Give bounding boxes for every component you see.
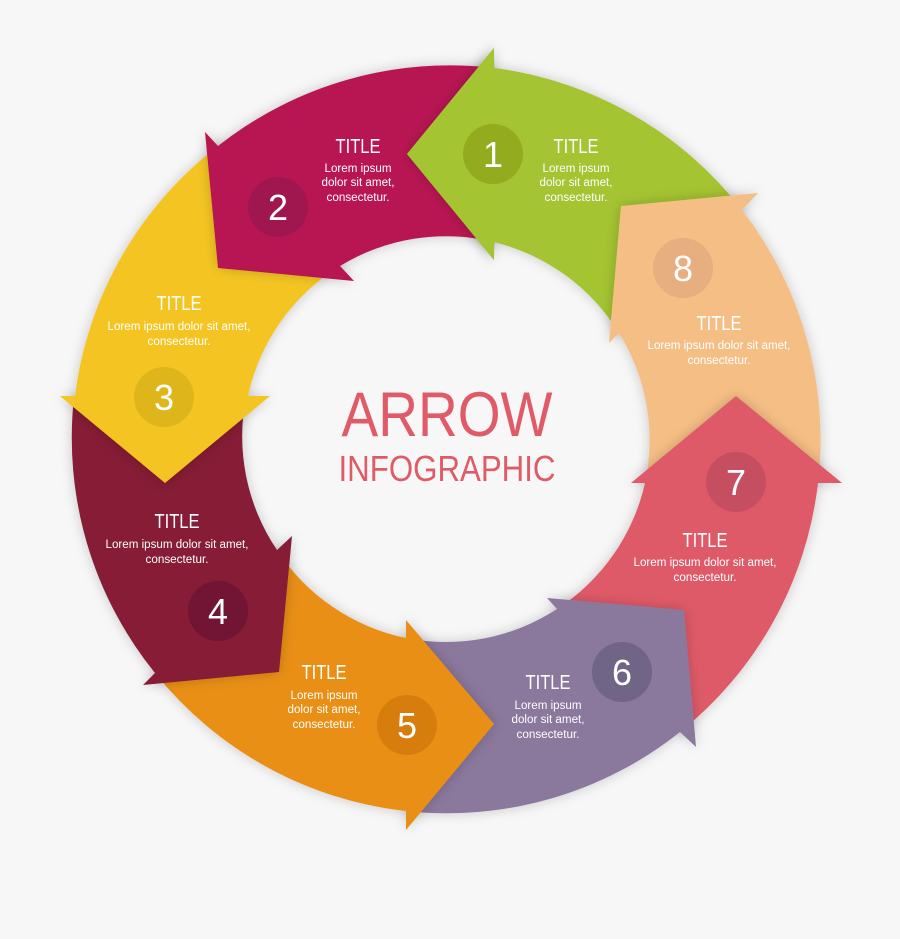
- arrow 4 shape: [72, 397, 292, 685]
- arrow 3: [60, 143, 340, 483]
- number badge 3: 3: [154, 377, 174, 418]
- text block 1: consectetur.: [544, 192, 608, 204]
- text block 6: TITLE: [526, 672, 570, 694]
- text block 4: Lorem ipsum dolor sit amet,: [106, 539, 249, 551]
- text block 7: Lorem ipsum dolor sit amet,: [634, 557, 776, 569]
- text block 5: TITLE: [302, 662, 346, 684]
- text block 6: dolor sit amet,: [512, 714, 584, 726]
- text block 7: consectetur.: [674, 572, 736, 584]
- text block 2: dolor sit amet,: [322, 177, 394, 189]
- text block 3: Lorem ipsum dolor sit amet,: [108, 321, 251, 333]
- text block 8: TITLE: [696, 313, 742, 335]
- number badge 4: 4: [208, 591, 228, 632]
- arrow 2 shape: [205, 65, 494, 281]
- arrow 1 head shape: [406, 48, 494, 260]
- text block 3: [108, 293, 251, 348]
- text block 6: consectetur.: [516, 729, 580, 741]
- text block 2: TITLE: [336, 136, 380, 158]
- text block 2: [322, 136, 394, 204]
- text block 1: Lorem ipsum: [542, 163, 610, 175]
- number badge 7: 7: [726, 462, 746, 503]
- text block 5: consectetur.: [292, 719, 356, 731]
- subheading: infographic: INFOGRAPHIC: [338, 448, 556, 489]
- text block 3: TITLE: [156, 293, 202, 315]
- text block 8: consectetur.: [688, 355, 750, 367]
- number badge 8: 8: [673, 248, 693, 289]
- arrow 8 shape: [609, 193, 821, 483]
- arrow 3 shape: [60, 143, 340, 483]
- text block 6: Lorem ipsum: [514, 700, 582, 712]
- arrow 7 shape: [557, 396, 842, 732]
- text block 1: dolor sit amet,: [540, 177, 612, 189]
- arrow 1 body: [407, 48, 742, 333]
- number badge 6: 6: [612, 652, 632, 693]
- number badge 2: [248, 177, 308, 237]
- number badge 8: [653, 238, 713, 298]
- text block 8: Lorem ipsum dolor sit amet,: [648, 340, 790, 352]
- arrow 7: [557, 396, 842, 732]
- number badge 1: [463, 124, 523, 184]
- heading: arrow: ARROW: [342, 380, 553, 450]
- text block 5: dolor sit amet,: [288, 704, 360, 716]
- number badge 1: 1: [483, 134, 503, 175]
- text block 5: Lorem ipsum: [290, 690, 358, 702]
- arrow 5: [155, 550, 494, 830]
- arrow 4: [72, 397, 292, 685]
- text block 5: [288, 662, 360, 731]
- center title: [338, 380, 556, 489]
- arrow 5 shape: [155, 550, 494, 830]
- number badge 4: [188, 581, 248, 641]
- number badge 7: [706, 452, 766, 512]
- number badge 2: 2: [268, 187, 288, 228]
- arrow 8: [609, 193, 821, 483]
- text block 1: [540, 136, 612, 204]
- arrow 6: [406, 598, 696, 813]
- text block 4: [106, 511, 249, 566]
- text block 7: [634, 530, 776, 584]
- text block 2: Lorem ipsum: [324, 163, 392, 175]
- number badge 6: [592, 642, 652, 702]
- arrow 1 head: [406, 48, 612, 272]
- text block 2: consectetur.: [326, 192, 390, 204]
- text block 6: [512, 672, 584, 741]
- number badge 5: [377, 695, 437, 755]
- text block 8: [648, 313, 790, 367]
- text block 4: TITLE: [154, 511, 200, 533]
- arrow 1 body overlay: [407, 48, 560, 272]
- arrow 2: [205, 65, 494, 281]
- text block 3: consectetur.: [148, 336, 210, 348]
- text block 7: TITLE: [682, 530, 728, 552]
- text block 1: TITLE: [554, 136, 598, 158]
- arrow 6 shape: [406, 598, 696, 813]
- number badge 3: [134, 367, 194, 427]
- text block 4: consectetur.: [146, 554, 208, 566]
- number badge 5: 5: [397, 705, 417, 746]
